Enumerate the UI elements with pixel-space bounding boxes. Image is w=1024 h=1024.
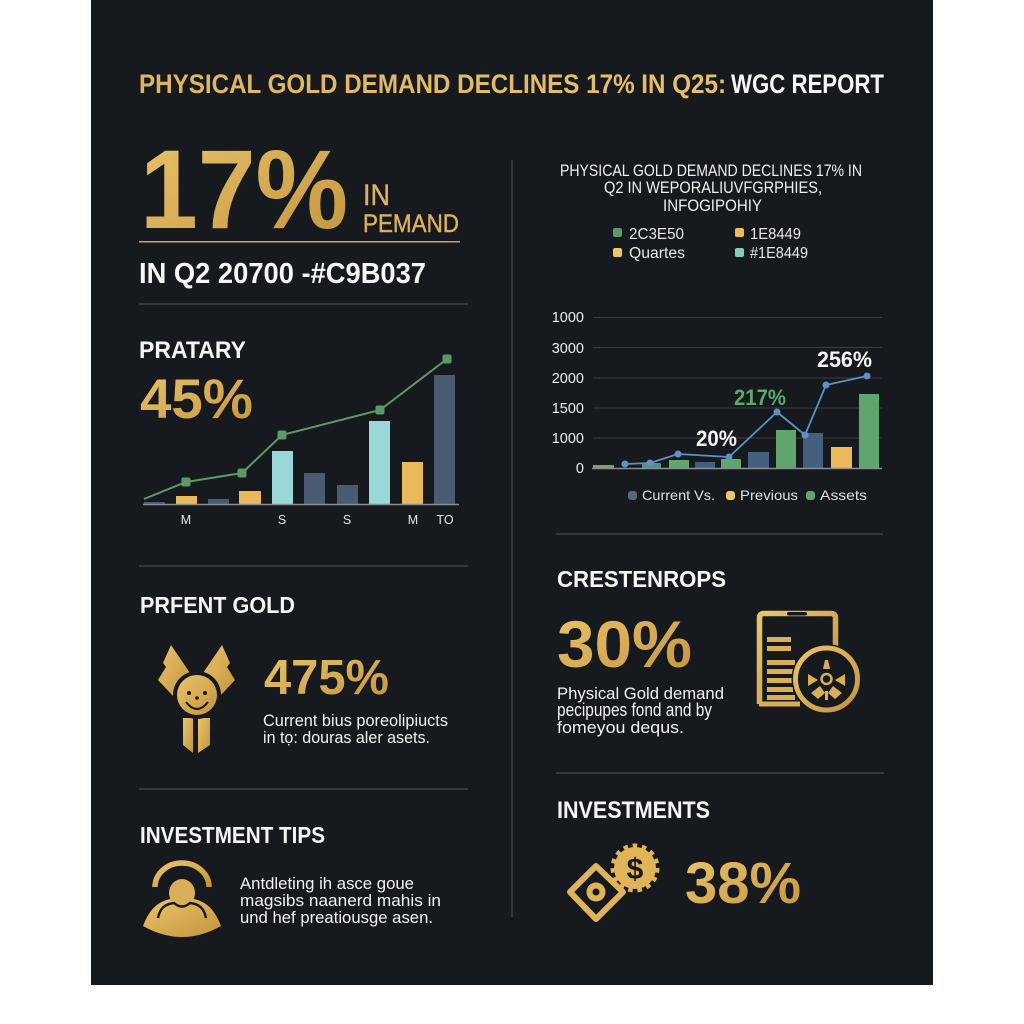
y axis labels: 2000: [552, 371, 584, 387]
bar and line chart: M: [408, 513, 418, 527]
text block: description: pecipupes fond and by: [557, 700, 712, 720]
colour legend: 1E8449: [750, 226, 801, 243]
text block: description: Current bius poreolipiucts: [263, 711, 448, 730]
data labels: [696, 347, 872, 451]
heading: investment tips: INVESTMENT TIPS: [140, 822, 325, 848]
panel: headline stat 17%: PEMAND: [363, 210, 459, 238]
y axis labels: 1000: [552, 310, 584, 326]
y axis labels: 1000: [552, 431, 584, 447]
title: WGC REPORT: [731, 69, 884, 99]
icon: diamond safe and dollar gear: [570, 846, 657, 919]
icon: document with dial: [759, 612, 862, 714]
text block: description: [557, 684, 724, 737]
panel: chart subtitle and legend: [560, 161, 862, 262]
text block: tips: [240, 874, 441, 927]
chart legend: [628, 487, 867, 503]
colour legend: 2C3E50: [629, 226, 684, 243]
panel: investment tips: [140, 822, 441, 937]
panel: crestenrops 30%: [557, 566, 862, 737]
trend line: [622, 372, 870, 468]
y axis labels: [552, 310, 584, 477]
colour legend: #1E8449: [750, 245, 808, 262]
stat: 30%: 30%: [557, 607, 692, 681]
title: PHYSICAL GOLD DEMAND DECLINES 17% IN Q25:: [139, 69, 726, 99]
data labels: 256%: [817, 347, 872, 372]
text block: tips: magsibs naanerd mahis in: [240, 891, 441, 910]
icon: diamond safe and dollar gear: $: [627, 853, 644, 886]
y axis labels: 1500: [552, 401, 584, 417]
chart heading: Q2 IN WEPORALIUVFGRPHIES,: [604, 178, 822, 197]
heading: present gold: PRFENT GOLD: [140, 592, 295, 618]
bar and line chart: M: [181, 513, 191, 527]
panel: headline stat 17%: 17%: [140, 127, 348, 252]
chart legend: Previous: [740, 487, 798, 503]
text block: tips: Antdleting ih asce goue: [240, 874, 414, 893]
panel: comparison bar and line chart: [552, 310, 882, 503]
heading: primary: PRATARY: [139, 337, 246, 364]
y axis labels: 3000: [552, 341, 584, 357]
colour legend: [613, 226, 808, 262]
panel: headline stat 17%: IN: [363, 179, 390, 212]
panel: investments 38%: [557, 797, 801, 919]
colour legend: Quartes: [629, 245, 685, 262]
data labels: 217%: [734, 385, 786, 410]
chart legend: Current Vs.: [642, 487, 715, 503]
stat: 45%: 45%: [140, 367, 253, 430]
bars: [592, 394, 882, 468]
panel: headline stat 17%: [139, 127, 460, 290]
icon: person under arc: [143, 863, 221, 937]
text block: description: Physical Gold demand: [557, 684, 724, 703]
icon: smiling medal: [158, 645, 235, 753]
text block: description: fomeyou dequs.: [557, 718, 684, 737]
bar and line chart: S: [343, 513, 351, 527]
text block: description: in tọ: douras aler asets.: [263, 728, 430, 747]
text block: tips: und hef preatiousge asen.: [240, 908, 433, 927]
stat: 38%: 38%: [685, 851, 801, 916]
panel: headline stat 17%: IN Q2 20700 -#C9B037: [139, 258, 426, 290]
chart legend: Assets: [820, 487, 867, 503]
bar and line chart: TO: [436, 513, 454, 527]
chart heading: PHYSICAL GOLD DEMAND DECLINES 17% IN: [560, 161, 862, 180]
panel: present gold 475%: [140, 592, 448, 753]
stat: 475%: 475%: [264, 651, 389, 705]
data labels: 20%: [696, 426, 737, 451]
chart heading: [560, 161, 862, 215]
bar and line chart: S: [278, 513, 286, 527]
chart heading: INFOGIPOHIY: [663, 196, 762, 215]
bar and line chart: [143, 354, 459, 527]
heading: crestenrops: CRESTENROPS: [557, 566, 726, 592]
heading: investments: INVESTMENTS: [557, 797, 710, 824]
dark page background panel: [91, 0, 933, 985]
text block: description: [263, 711, 448, 747]
panel: primary 45% with chart: [139, 337, 459, 527]
y axis labels: 0: [576, 461, 584, 477]
